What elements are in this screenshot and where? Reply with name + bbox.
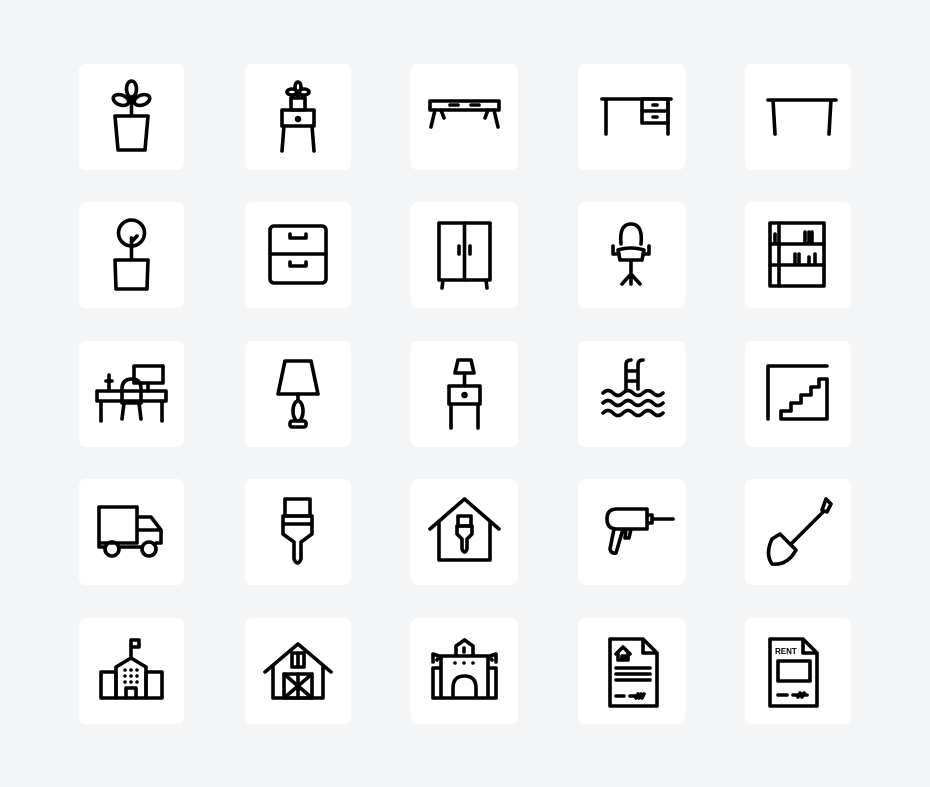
tile: office chair [578, 202, 685, 308]
tile: table [745, 64, 851, 170]
tile: desk [578, 64, 685, 170]
tile: house with brush [411, 479, 518, 585]
tile: nightstand with plant [245, 64, 351, 170]
tile: truck [79, 479, 184, 585]
tile: barn [245, 618, 351, 724]
tile: house document [578, 618, 685, 724]
tile: potted plant [79, 64, 184, 170]
tile: shovel [745, 479, 851, 585]
tile: pool [578, 341, 685, 447]
tile: bookshelf [745, 202, 851, 308]
tile: stairs [745, 341, 851, 447]
tile: workspace [79, 341, 184, 447]
tile: school [79, 618, 184, 724]
tile: nightstand lamp [411, 341, 518, 447]
tile: rent document [745, 618, 851, 724]
tile: rent document: RENT [775, 647, 797, 656]
tile: wardrobe [411, 202, 518, 308]
tile: drawers [245, 202, 351, 308]
tile: drill [578, 479, 685, 585]
tile: paint brush [245, 479, 351, 585]
tile: lamp [245, 341, 351, 447]
tile: potted tree [79, 202, 184, 308]
tile: bench [411, 64, 518, 170]
tile: castle [411, 618, 518, 724]
